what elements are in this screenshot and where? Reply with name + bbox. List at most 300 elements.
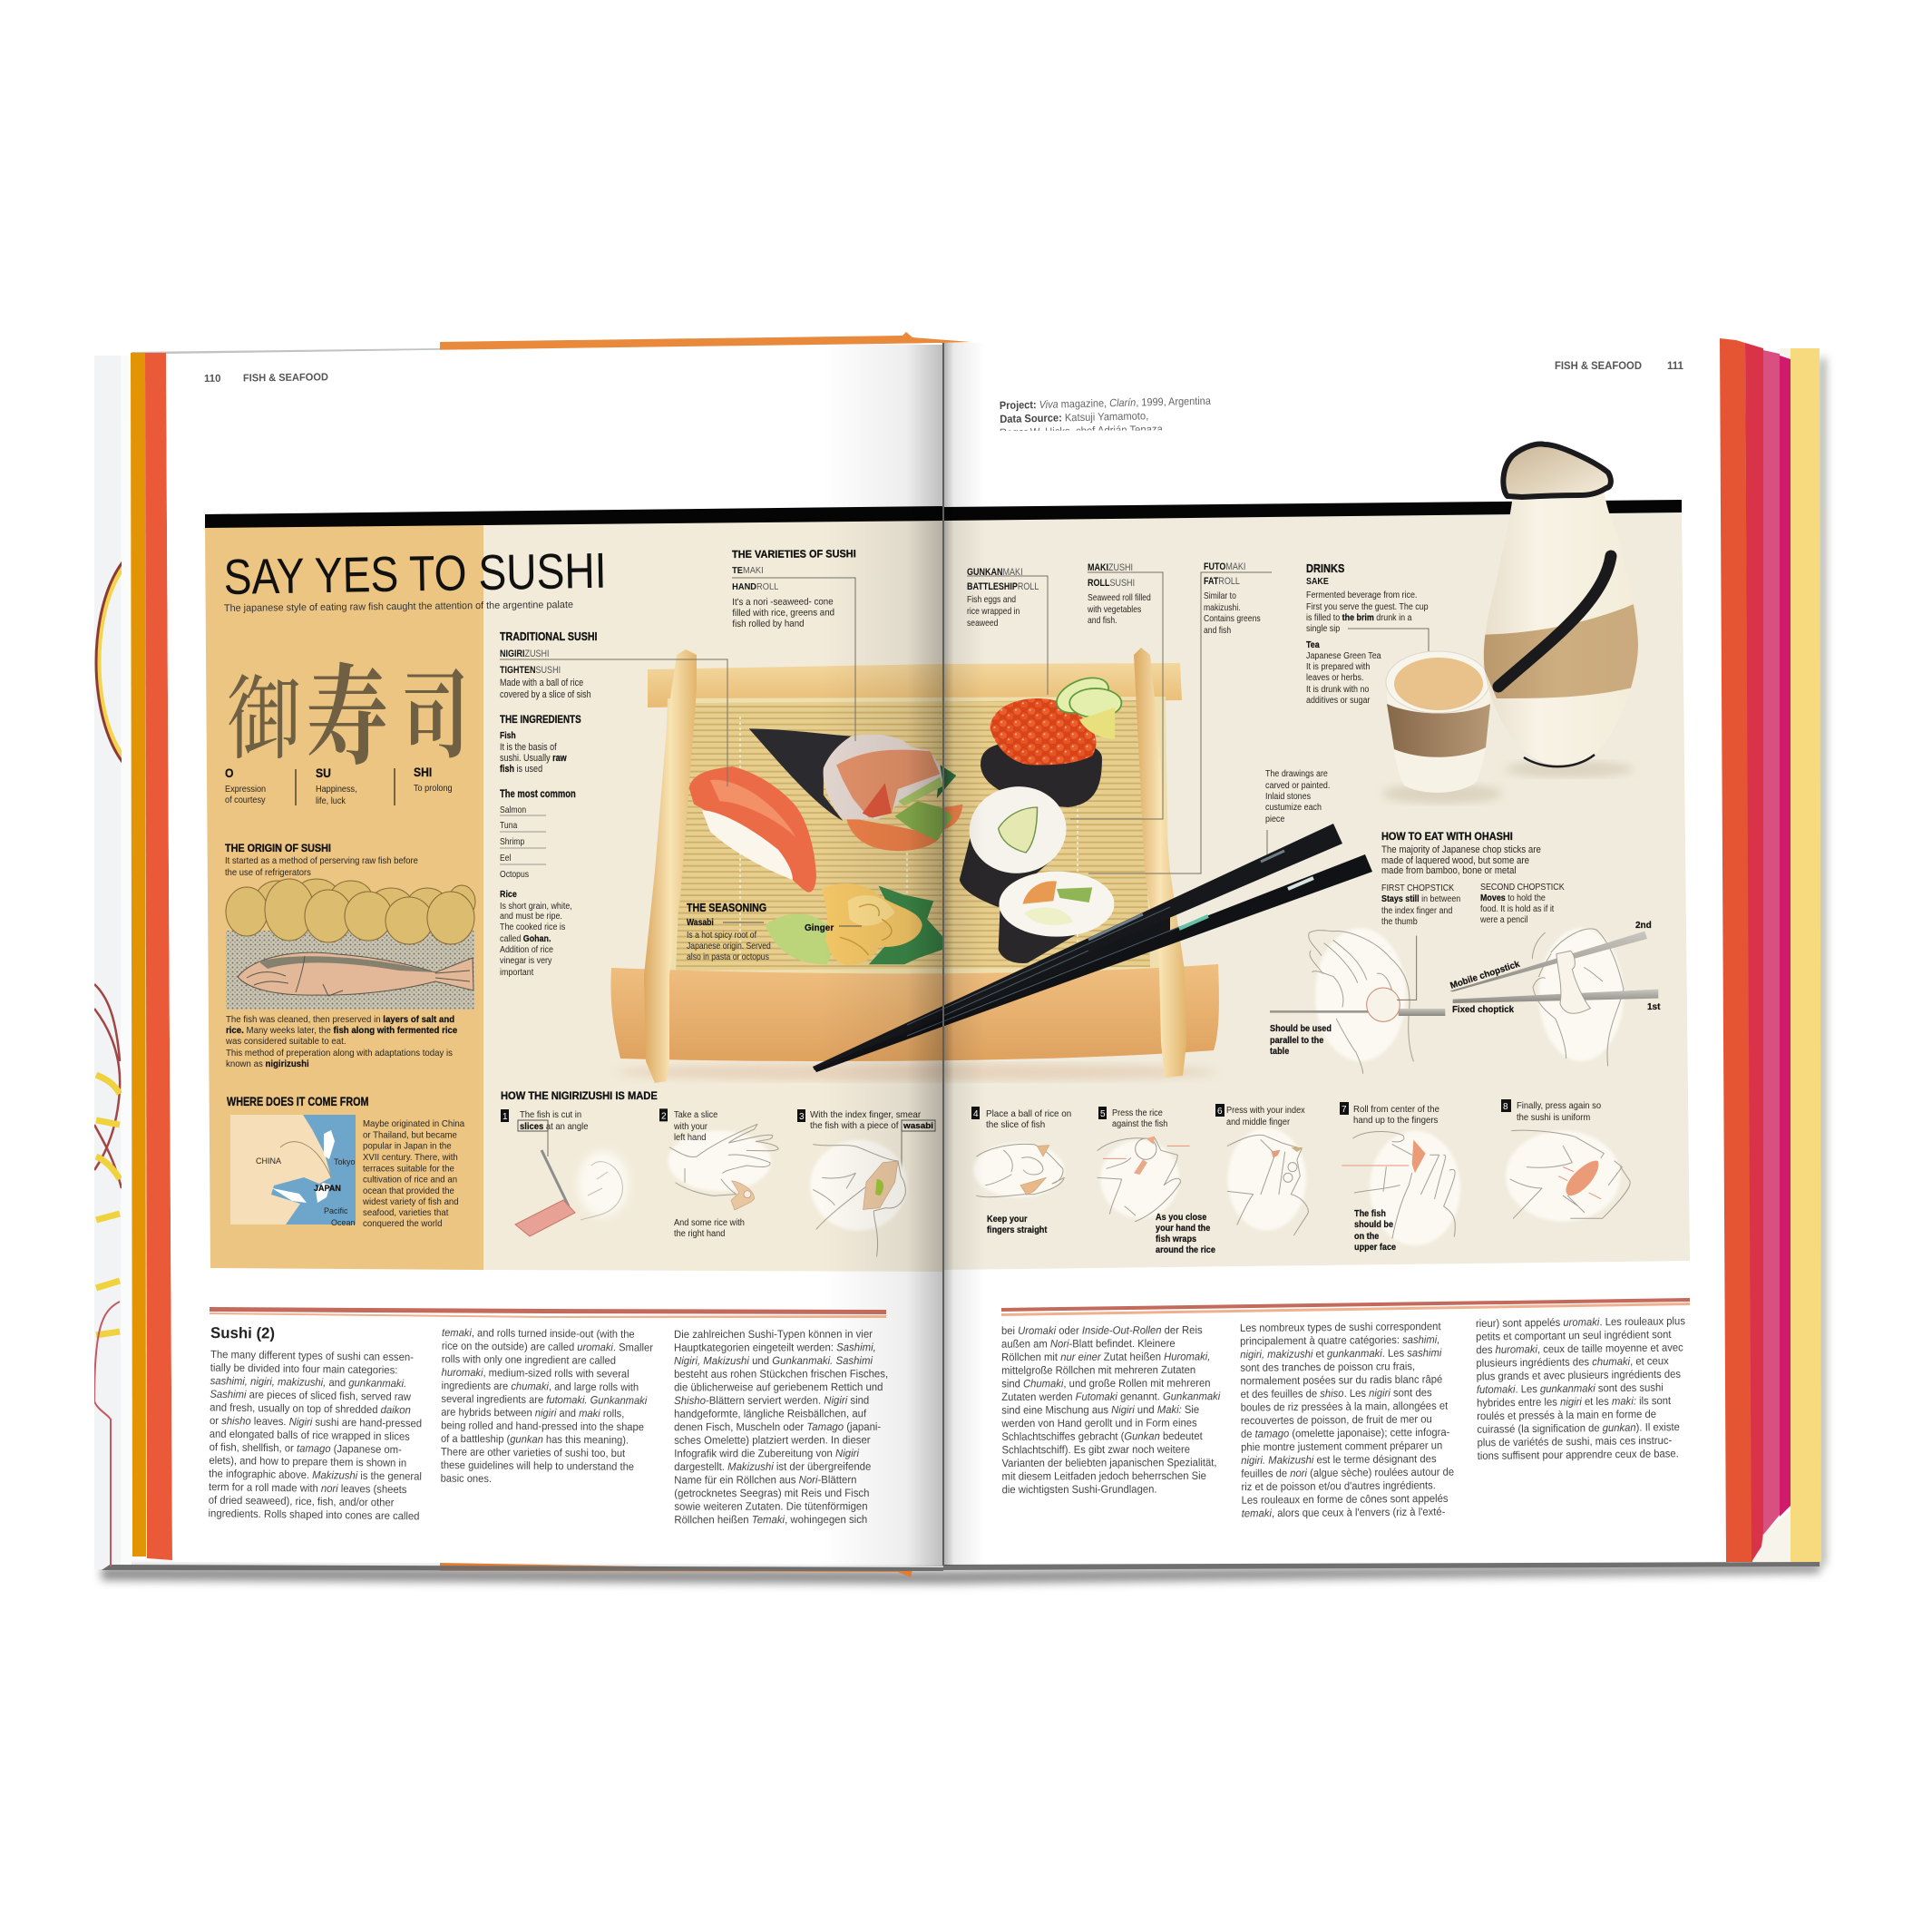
- syllable SU: Happiness,: [316, 784, 357, 795]
- body column 1: of fish, shellfish, or tamago (Japanese om-: [210, 1441, 402, 1456]
- project credits clipped line: Roger W. Hicks, chef Adrián Tenaza: [1000, 423, 1163, 439]
- step 2 text: the right hand: [674, 1229, 725, 1239]
- origin heading and intro: THE ORIGIN OF SUSHI: [225, 844, 331, 854]
- map description: terraces suitable for the: [363, 1164, 454, 1174]
- origin caption: known as nigirizushi: [226, 1059, 309, 1069]
- maki roll upper: [959, 776, 1077, 907]
- syllable SHI: [414, 765, 453, 794]
- syllable SU: SU: [316, 766, 331, 780]
- body column 3: Nigiri, Makizushi und Gunkanmaki. Sashimi: [674, 1355, 873, 1367]
- varieties: futomaki: and fish: [1204, 625, 1231, 636]
- varieties: makizushi: ROLLSUSHI: [1088, 578, 1135, 589]
- temaki hand roll: [749, 728, 956, 821]
- body column 1: of dried seaweed), rice, fish, and/or other: [209, 1494, 395, 1509]
- step 4: 4: [973, 1109, 979, 1119]
- ingredients text: fish is used: [500, 764, 542, 775]
- body column 5: de tamago (omelette japonaise); cette infogra-: [1241, 1426, 1449, 1440]
- illustration: fish under salt and stones: [226, 879, 475, 1010]
- note: parallel to the table: Should be used: [1270, 1023, 1332, 1034]
- body column 5: [1240, 1321, 1455, 1519]
- chopsticks: [813, 824, 1372, 1072]
- body column 2: several ingredients are futomaki. Gunkanmaki: [441, 1394, 647, 1407]
- tray photo: inner frame: [658, 697, 1170, 978]
- drinks text: DRINKS: [1306, 561, 1344, 575]
- body column 5: nigiri, makizushi et gunkanmaki. Les sashimi: [1240, 1347, 1441, 1361]
- map description: XVII century. There, with: [363, 1153, 458, 1163]
- how to eat with ohashi: made from bamboo, bone or metal: [1381, 866, 1516, 876]
- body column 4: mit diesem Leitfaden jedoch beherrschen Sie: [1002, 1470, 1206, 1483]
- body column 4: werden von Hand gerollt und in Form eines: [1000, 1417, 1197, 1429]
- map of Japan: Pacific: [324, 1206, 348, 1215]
- infographic panel background: [205, 512, 1690, 1272]
- map description: Maybe originated in China: [363, 1119, 464, 1129]
- syllable O: O: [225, 766, 233, 780]
- rice text: vinegar is very: [500, 955, 552, 966]
- map description: conquered the world: [363, 1219, 442, 1229]
- step 2: 2: [661, 1111, 667, 1121]
- syllable SHI: SHI: [414, 765, 432, 779]
- body rule right: [1001, 1298, 1690, 1316]
- body column 6: petits et comportant un seul ingrédient sont: [1476, 1329, 1672, 1343]
- seasoning text: THE SEASONING: [687, 901, 766, 914]
- step 7: [1340, 1102, 1460, 1253]
- step 5: [1098, 1107, 1215, 1255]
- body column 6: plus de variétés de sushi, mais ces instruc-: [1477, 1434, 1672, 1449]
- map description: or Thailand, but became: [363, 1130, 457, 1140]
- origin heading and intro: It started as a method of perserving raw fish before: [225, 856, 418, 866]
- body column 2: are hybrids between nigiri and maki rolls,: [441, 1407, 624, 1420]
- decorative arcs on left fore-edge: [94, 561, 122, 1566]
- origin caption: rice. Many weeks later, the fish along with fermented rice: [226, 1026, 458, 1036]
- varieties: futomaki: makizushi.: [1204, 602, 1241, 613]
- body column 2: ingredients are chumaki, and large rolls with: [441, 1381, 639, 1393]
- body column 5: Les rouleaux en forme de cônes sont appelés: [1242, 1492, 1449, 1507]
- body column 4: Röllchen mit nur einer Zutat heißen Huromaki,: [1001, 1351, 1210, 1363]
- map description: widest variety of fish and: [362, 1197, 459, 1207]
- origin caption: This method of preperation along with adaptations today is: [226, 1049, 453, 1059]
- step 6: [1215, 1104, 1308, 1235]
- chopstick drawings note: Inlaid stones: [1265, 791, 1311, 802]
- map description: seafood, varieties that: [363, 1208, 449, 1218]
- body column 4: bei Uromaki oder Inside-Out-Rollen der Reis: [1001, 1324, 1203, 1337]
- body column 6: tions suffisent pour apprendre ceux de base.: [1478, 1448, 1679, 1462]
- body column 3: [674, 1328, 888, 1526]
- where does it come from heading: WHERE DOES IT COME FROM: [227, 1095, 369, 1108]
- ingredients text: The most common: [500, 788, 576, 800]
- drinks text: Fermented beverage from rice.: [1306, 590, 1417, 600]
- project credits: [1000, 395, 1212, 425]
- step 5: around the rice: [1156, 1244, 1215, 1255]
- step 2 text: Take a slice: [674, 1110, 718, 1120]
- step 3: [797, 1109, 935, 1256]
- step 2 text: left hand: [674, 1133, 706, 1143]
- map description: cultivation of rice and an: [363, 1175, 457, 1186]
- origin heading and intro: [225, 844, 418, 878]
- tray photo: back bar: [648, 663, 1182, 707]
- rice text: Addition of rice: [500, 944, 553, 955]
- label: fixed chopstick: Fixed choptick: [1452, 1005, 1514, 1015]
- pickled ginger rose: [822, 883, 922, 965]
- map of Japan: CHINA: [256, 1156, 281, 1166]
- kanji calligraphy: 寿: [307, 659, 388, 778]
- gunkan with roe: [981, 671, 1121, 807]
- leaf garnish: [869, 886, 943, 964]
- rice text: Is short grain, white,: [500, 901, 572, 912]
- step 8: [1501, 1099, 1630, 1222]
- page header right: [1555, 361, 1684, 372]
- traditional sushi text: Made with a ball of rice: [500, 678, 584, 688]
- body column 2: being rolled and hand-pressed into the shape: [441, 1420, 644, 1433]
- body column 4: außen am Nori-Blatt befindet. Kleinere: [1001, 1338, 1176, 1351]
- body column 1: sashimi, nigiri, makizushi, and gunkanmaki.: [210, 1375, 406, 1390]
- drinks text: [1306, 561, 1429, 706]
- syllable SU: life, luck: [316, 795, 346, 806]
- step 2: [659, 1108, 778, 1210]
- step 6: Press with your index: [1226, 1105, 1305, 1116]
- step 5: As you close: [1156, 1212, 1207, 1223]
- drinks text: Japanese Green Tea: [1306, 650, 1381, 661]
- step 7: Roll from center of the: [1353, 1105, 1439, 1115]
- tray photo: soft shadow: [617, 1063, 1215, 1081]
- body column 4: Zutaten werden Futomaki genannt. Gunkanmaki: [1001, 1390, 1220, 1403]
- title: SAY YES TO SUSHI: [223, 542, 607, 605]
- syllable O: of courtesy: [225, 795, 266, 805]
- map description: ocean that provided the: [363, 1186, 454, 1196]
- first chopstick text: [1381, 883, 1460, 927]
- chopstick drawings note: custumize each: [1265, 802, 1322, 813]
- ingredients text: THE INGREDIENTS: [500, 714, 581, 726]
- map of Japan: [230, 1115, 356, 1227]
- body column 5: phie montre justement comment préparer un: [1241, 1439, 1442, 1453]
- body column 5: principalement à quatre catégories: sashimi,: [1240, 1333, 1439, 1348]
- body column 1: ingredients. Rolls shaped into cones are called: [209, 1508, 420, 1523]
- body column 6: rieur) sont appelés uromaki. Les rouleaux plus: [1476, 1315, 1685, 1330]
- wasabi: [766, 913, 831, 964]
- note: parallel to the table: [1270, 1023, 1332, 1057]
- second chopstick text: food. It is hold as if it: [1480, 903, 1555, 914]
- body column 3: besteht aus rohen Stückchen frischen Fisches,: [674, 1368, 888, 1381]
- step 6: and middle finger: [1226, 1117, 1291, 1127]
- step 3: the fish with a piece of: [810, 1121, 899, 1131]
- carrot garnish: [846, 805, 962, 851]
- body column 3: sches Omelette) platziert werden. In dieser: [674, 1434, 871, 1447]
- step 4: Place a ball of rice on: [986, 1109, 1071, 1119]
- body column 3: dargestellt. Makizushi ist der übergreifende: [674, 1460, 871, 1473]
- varieties: futomaki: FUTOMAKI: [1204, 561, 1245, 572]
- varieties: gunkanmaki: BATTLESHIPROLL: [967, 581, 1039, 592]
- seasoning text: [687, 901, 771, 962]
- ingredients text: [500, 714, 581, 880]
- body column 6: des huromaki, ceux de taille moyenne et avec: [1476, 1342, 1683, 1356]
- varieties: makizushi: MAKIZUSHI: [1088, 562, 1133, 573]
- label: mobile chopstick: Mobile chopstick: [1449, 960, 1521, 991]
- drinks text: single sip: [1306, 623, 1340, 634]
- varieties: makizushi: [1087, 562, 1151, 626]
- page header left: FISH & SEAFOOD: [243, 372, 328, 384]
- body column 6: cuirassé (la signification de gunkan). Il existe: [1477, 1421, 1680, 1436]
- rice text: The cooked rice is: [500, 922, 565, 932]
- ginger label: [723, 922, 862, 933]
- varieties: gunkanmaki: rice wrapped in: [967, 606, 1020, 617]
- drinks text: additives or sugar: [1306, 695, 1371, 706]
- body column 3: Infografik wird die Zubereitung von Nigiri: [674, 1448, 859, 1459]
- body column 6: hybrides entre les nigiri et les maki: ils sont: [1477, 1395, 1671, 1410]
- map description: [362, 1119, 464, 1229]
- step 5: your hand the: [1156, 1223, 1211, 1234]
- body heading: Sushi (2): [210, 1324, 275, 1342]
- varieties: temaki: It's a nori -seaweed- cone: [732, 597, 834, 608]
- syllable O: Expression: [225, 784, 266, 795]
- body column 1: [209, 1349, 424, 1523]
- first chopstick text: FIRST CHOPSTICK: [1381, 883, 1455, 893]
- step 5: 5: [1100, 1109, 1106, 1119]
- ingredients text: Tuna: [500, 820, 518, 831]
- step 5: fish wraps: [1156, 1234, 1197, 1244]
- varieties: temaki: HANDROLL: [732, 581, 779, 592]
- map description: popular in Japan in the: [363, 1141, 452, 1152]
- step 7: should be: [1354, 1219, 1394, 1230]
- varieties: gunkanmaki: GUNKANMAKI: [967, 567, 1023, 578]
- drinks text: is filled to the brim drunk in a: [1306, 612, 1412, 623]
- origin heading and intro: the use of refrigerators: [225, 868, 311, 878]
- body column 2: [441, 1328, 653, 1487]
- body column 5: feuilles de nori (algue sèche) roulées autour de: [1241, 1466, 1454, 1480]
- label: 2nd: 2nd: [1635, 921, 1652, 931]
- body column 5: boules de riz pressées à la main, allongées et: [1241, 1400, 1449, 1414]
- body column 5: et des feuilles de shiso. Les nigiri sont des: [1241, 1387, 1432, 1400]
- varieties: gunkanmaki: Fish eggs and: [967, 594, 1016, 605]
- seasoning text: Is a hot spicy root of: [687, 930, 756, 941]
- body column 3: (getrocknetes Seegras) mit Reis und Fisch: [674, 1488, 869, 1499]
- varieties: gunkanmaki: [967, 567, 1039, 629]
- body column 4: [1000, 1324, 1221, 1496]
- syllable SU: [316, 766, 357, 806]
- step 6: 6: [1217, 1107, 1223, 1117]
- body column 3: die üblicherweise auf geriebenem Rettich und: [674, 1381, 883, 1393]
- body column 2: these guidelines will help to understand the: [441, 1460, 634, 1473]
- first chopstick text: the thumb: [1381, 916, 1418, 927]
- kanji calligraphy: 司: [402, 664, 469, 770]
- seasoning text: Japanese origin. Served: [687, 941, 771, 951]
- body column 4: Varianten der beliebten japanischen Spezialität,: [1001, 1457, 1217, 1469]
- traditional sushi text: TRADITIONAL SUSHI: [500, 629, 597, 643]
- body column 3: Name für ein Röllchen aus Nori-Blättern: [674, 1474, 857, 1487]
- second chopstick text: Moves to hold the: [1480, 893, 1546, 903]
- step 3: With the index finger, smear: [810, 1110, 922, 1120]
- body column 1: and fresh, usually on top of shredded daikon: [210, 1401, 411, 1417]
- varieties: futomaki: FATROLL: [1204, 576, 1240, 587]
- body column 5: Les nombreux types de sushi correspondent: [1240, 1321, 1441, 1334]
- ingredients text: Octopus: [500, 869, 529, 880]
- traditional sushi text: covered by a slice of sish: [500, 689, 591, 700]
- varieties: makizushi: Seaweed roll filled: [1088, 592, 1151, 603]
- rice text: and must be ripe.: [500, 911, 562, 922]
- body column 1: the infographic above. Makizushi is the general: [209, 1468, 422, 1483]
- rice text: [500, 889, 572, 978]
- body column 6: plusieurs ingrédients des chumaki, et ceux: [1476, 1355, 1669, 1370]
- body column 1: The many different types of sushi can essen-: [210, 1349, 414, 1363]
- traditional sushi text: TIGHTENSUSHI: [500, 665, 561, 676]
- body column 6: futomaki. Les gunkanmaki sont des sushi: [1477, 1381, 1664, 1396]
- body column 2: rolls with only one ingredient are called: [442, 1354, 616, 1367]
- ginger label: Ginger: [805, 923, 834, 933]
- ingredients text: Eel: [500, 853, 511, 864]
- note: parallel to the table: table: [1270, 1046, 1290, 1057]
- page header right: FISH & SEAFOOD: [1555, 361, 1642, 372]
- body column 1: and elongated balls of rice wrapped in slices: [210, 1428, 410, 1443]
- body column 5: sont des tranches de poisson cru frais,: [1240, 1361, 1415, 1374]
- step 4: fingers straight: [987, 1225, 1048, 1235]
- body column 6: plus grands et avec plusieurs ingrédients des: [1477, 1368, 1681, 1382]
- step 8: 8: [1503, 1102, 1508, 1112]
- how to eat with ohashi: HOW TO EAT WITH OHASHI: [1381, 830, 1513, 843]
- step 1: [501, 1109, 629, 1236]
- how to eat with ohashi: made of laquered wood, but some are: [1381, 856, 1529, 866]
- step 2 text: with your: [673, 1122, 708, 1132]
- step 8: Finally, press again so: [1517, 1101, 1602, 1111]
- step 3: 3: [799, 1112, 805, 1122]
- body column 5: temaki, alors que ceux à l'envers (riz à l'exté-: [1242, 1506, 1445, 1519]
- varieties: futomaki: Contains greens: [1204, 613, 1261, 624]
- body column 4: Schlachtschiffes gebracht (Gunkan bedeutet: [1001, 1430, 1203, 1443]
- ingredients text: Salmon: [500, 805, 526, 815]
- origin caption: The fish was cleaned, then preserved in layers of salt and: [226, 1015, 454, 1025]
- step 7: upper face: [1354, 1242, 1397, 1253]
- step 2 text: [673, 1110, 745, 1239]
- body column 3: Röllchen heißen Temaki, wohingegen sich: [674, 1514, 867, 1526]
- rice text: Rice: [500, 889, 517, 900]
- step 4: the slice of fish: [986, 1120, 1045, 1130]
- tray photo: front bar: [610, 964, 1219, 1061]
- drinks text: First you serve the guest. The cup: [1306, 601, 1429, 612]
- kanji calligraphy: 御: [227, 669, 302, 771]
- traditional sushi text: NIGIRIZUSHI: [500, 649, 550, 659]
- body rule left: [210, 1307, 886, 1318]
- label: 1st: 1st: [1647, 1002, 1661, 1012]
- step 8: the sushi is uniform: [1517, 1113, 1590, 1123]
- hand holding first chopstick: [1270, 928, 1445, 1073]
- left page block with stripes: [94, 343, 943, 1571]
- hand holding two chopsticks: [1449, 928, 1658, 1066]
- body column 1: elets), and how to prepare them is shown in: [209, 1454, 406, 1469]
- body column 2: huromaki, medium-sized rolls with several: [442, 1367, 629, 1381]
- drinks text: SAKE: [1306, 576, 1329, 587]
- sake cup: [1382, 651, 1502, 804]
- cover edge: top orange band: [440, 332, 971, 352]
- chopstick drawings note: carved or painted.: [1265, 780, 1330, 791]
- body column 3: denen Fisch, Muscheln oder Tamago (japani-: [674, 1421, 881, 1433]
- chopstick drawings note: [1265, 768, 1330, 825]
- first chopstick text: Stays still in between: [1381, 893, 1460, 904]
- body column 4: Schlachtschiff). Es gibt zwar noch weitere: [1001, 1443, 1190, 1456]
- varieties: temaki: fish rolled by hand: [732, 619, 805, 629]
- varieties: makizushi: with vegetables: [1087, 604, 1141, 615]
- body column 4: die wichtigsten Sushi-Grundlagen.: [1002, 1483, 1157, 1496]
- body column 3: Shisho-Blättern serviert werden. Nigiri sind: [674, 1394, 869, 1407]
- origin caption: was considered suitable to eat.: [225, 1037, 346, 1047]
- body column 3: Hauptkategorien eingeteilt werden: Sashimi,: [674, 1342, 876, 1354]
- drinks text: Tea: [1306, 639, 1320, 650]
- origin caption: [225, 1015, 458, 1069]
- map of Japan: JAPAN: [314, 1184, 341, 1193]
- varieties: futomaki: [1204, 561, 1261, 636]
- project credits: Data Source: Katsuji Yamamoto,: [1000, 409, 1148, 425]
- maki roll lower: [999, 872, 1115, 963]
- how to eat with ohashi: The majority of Japanese chop sticks are: [1381, 845, 1541, 855]
- book shadow: [102, 358, 1825, 1584]
- body column 3: Die zahlreichen Sushi-Typen können in vier: [674, 1328, 873, 1341]
- body column 4: sind eine Mischung aus Nigiri und Maki: Sie: [1001, 1404, 1199, 1417]
- first chopstick text: the index finger and: [1381, 905, 1452, 916]
- step 1: The fish is cut in: [520, 1110, 581, 1120]
- subtitle: The japanese style of eating raw fish caught the attention of the argentine palate: [224, 600, 573, 614]
- body column 1: term for a roll made with nori leaves (sheets: [209, 1481, 407, 1496]
- step 7: hand up to the fingers: [1353, 1116, 1438, 1126]
- body column 2: of a battleship (gunkan has this meaning).: [441, 1433, 629, 1447]
- syllable SHI: To prolong: [414, 783, 453, 794]
- step 7: on the: [1354, 1231, 1380, 1242]
- body column 6: [1476, 1315, 1687, 1462]
- ingredients text: Fish: [500, 730, 516, 741]
- step 7: 7: [1342, 1105, 1347, 1115]
- step 1: slices at an angle: [520, 1122, 589, 1132]
- nigiri: [689, 766, 816, 893]
- body column 1: Sashimi are pieces of sliced fish, served raw: [210, 1388, 411, 1403]
- body column 4: mittelgroße Röllchen mit mehreren Zutaten: [1001, 1364, 1195, 1377]
- right page block with stripes: [943, 338, 1821, 1570]
- body column 2: basic ones.: [441, 1473, 492, 1485]
- ingredients text: It is the basis of: [500, 742, 557, 753]
- open book spread infographic: [94, 332, 1831, 1590]
- step 5: Press the rice: [1112, 1107, 1163, 1118]
- syllable O: [225, 766, 266, 805]
- varieties: makizushi: and fish.: [1088, 615, 1117, 626]
- body column 3: handgeformte, längliche Reisbällchen, auf: [674, 1408, 867, 1420]
- body column 2: temaki, and rolls turned inside-out (with the: [442, 1328, 635, 1341]
- drinks text: It is drunk with no: [1306, 684, 1369, 695]
- drinks text: leaves or herbs.: [1306, 672, 1363, 683]
- rice text: called Gohan.: [500, 933, 551, 944]
- tray photo: mat strings: [740, 717, 1078, 961]
- step 1: 1: [503, 1112, 508, 1122]
- body column 2: rice on the outside) are called uromaki. Smaller: [442, 1341, 653, 1354]
- varieties: futomaki: Similar to: [1204, 590, 1236, 601]
- second chopstick text: SECOND CHOPSTICK: [1480, 882, 1565, 893]
- cover edge: bottom orange band: [440, 1563, 912, 1577]
- varieties: temaki: THE VARIETIES OF SUSHI: [732, 549, 856, 561]
- body column 3: sowie weiteren Zutaten. Die tütenförmigen: [674, 1500, 868, 1513]
- step 4: Keep your: [987, 1214, 1028, 1225]
- black header bar: [205, 500, 1682, 528]
- varieties: gunkanmaki: seaweed: [967, 618, 998, 629]
- tray photo: right stick: [1134, 648, 1186, 1078]
- body column 1: tially be divided into four main categories:: [210, 1361, 397, 1377]
- body column 1: or shisho leaves. Nigiri sushi are hand-pressed: [210, 1415, 422, 1429]
- chopstick drawings note: The drawings are: [1265, 768, 1328, 779]
- note: parallel to the table: parallel to the: [1270, 1035, 1324, 1046]
- varieties: temaki: [732, 549, 856, 629]
- spine shading: [821, 343, 985, 1566]
- varieties: temaki: TEMAKI: [732, 566, 764, 576]
- body column 5: normalement posées sur du radis blanc râpé: [1240, 1373, 1442, 1387]
- chopstick drawings note: piece: [1265, 814, 1284, 825]
- ingredients text: sushi. Usually raw: [500, 753, 567, 764]
- page header left: [204, 372, 328, 385]
- step 4: [971, 1107, 1071, 1235]
- step 7: The fish: [1354, 1208, 1386, 1219]
- traditional sushi text: [500, 629, 597, 700]
- cucumber garnish: [894, 801, 953, 841]
